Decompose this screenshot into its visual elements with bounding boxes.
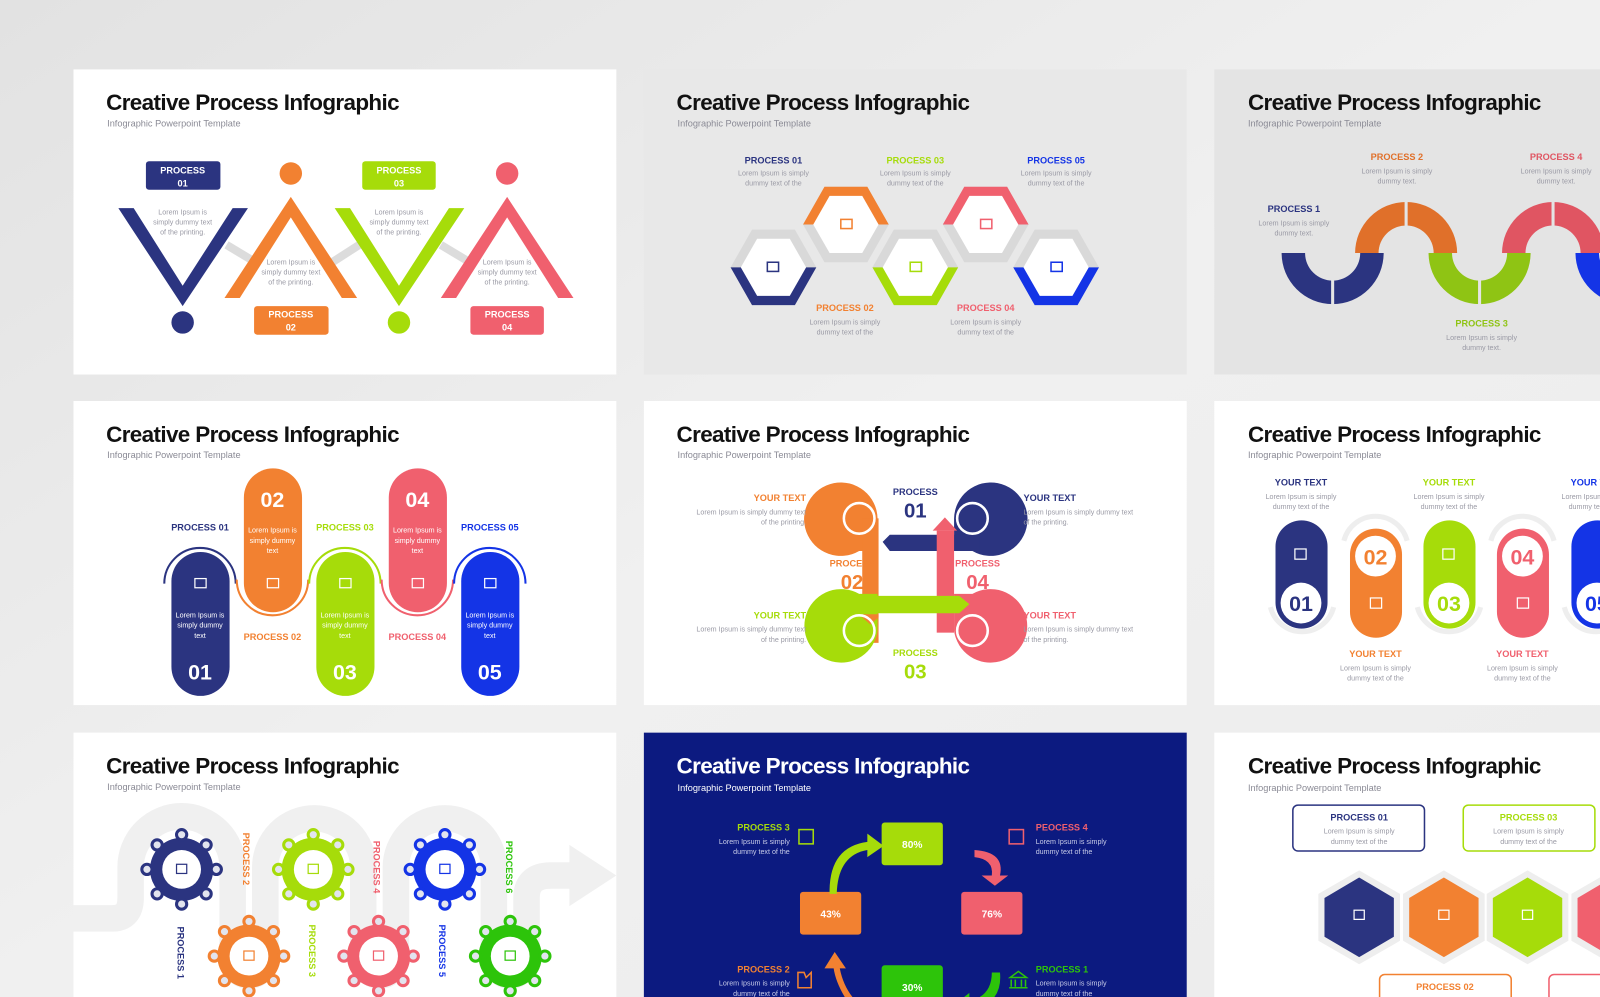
process texts <box>719 823 1107 997</box>
title: Creative Process Infographic <box>106 90 399 115</box>
top boxes: Lorem Ipsum is simply <box>1324 828 1395 836</box>
process texts: PROCESS 3 <box>737 823 790 833</box>
pill 01: 01 <box>1289 592 1313 616</box>
panel: card 6 numbered pills: Lorem Ipsum is simply <box>1414 493 1485 501</box>
triangle 4 pink: 04 <box>502 323 513 333</box>
labels: PROCESS 01 <box>745 155 802 165</box>
labels: Lorem Ipsum is simply <box>880 170 951 178</box>
triangle 2 orange: of the printing. <box>268 279 313 287</box>
panel: card 6 numbered pills: Lorem Ipsum is simply <box>1487 664 1558 672</box>
pill 04: simply dummy <box>395 537 441 545</box>
text blocks: YOUR TEXT <box>1023 610 1076 620</box>
pill 01: text <box>194 632 206 640</box>
title: Creative Process Infographic <box>1248 90 1541 115</box>
labels: dummy text of the <box>817 329 873 337</box>
labels: Lorem Ipsum is simply <box>1361 167 1433 175</box>
panel: card 5 loop: 01 <box>904 500 927 522</box>
labels: PROCESS 04 <box>957 303 1015 313</box>
triangle 1 navy: of the printing. <box>160 229 205 237</box>
pill 05 <box>1571 520 1600 629</box>
text blocks: YOUR TEXT <box>754 610 807 620</box>
pill 01: PROCESS 01 <box>171 523 229 533</box>
vertical labels: PROCESS 3 <box>307 924 317 977</box>
labels: dummy text. <box>1462 344 1501 352</box>
text blocks: YOUR TEXT <box>754 493 807 503</box>
pill 03 <box>316 523 374 696</box>
panel: card 5 loop: PROCESS <box>955 558 1000 568</box>
triangle 3 green <box>335 161 464 334</box>
process texts: PROCESS 2 <box>737 964 790 974</box>
text blocks: of the printing. <box>1023 636 1069 644</box>
pill 02: text <box>267 547 278 555</box>
labels: PROCESS 05 <box>1027 155 1085 165</box>
top boxes: PROCESS 02 <box>1416 982 1474 992</box>
wave segments <box>1282 200 1600 306</box>
triangle 3 green: 03 <box>394 179 404 189</box>
pill 05: simply dummy <box>467 622 513 630</box>
road path <box>73 816 571 976</box>
pill 03: 03 <box>1437 592 1461 616</box>
text blocks: Lorem Ipsum is simply dummy text <box>696 626 806 634</box>
subtitle: Infographic Powerpoint Template <box>1248 450 1381 460</box>
boxes: 76% <box>982 909 1002 920</box>
pill 02 <box>244 468 302 642</box>
title: Creative Process Infographic <box>1248 753 1541 778</box>
panel: card 6 numbered pills: dummy text of the <box>1494 675 1551 683</box>
triangle 3 green: simply dummy text <box>369 218 428 226</box>
hexagons <box>1318 870 1600 964</box>
pill 02: Lorem Ipsum is <box>248 527 297 535</box>
panel: card 8 cycle dark <box>644 733 1187 997</box>
pill 01 <box>1276 520 1328 629</box>
subtitle: Infographic Powerpoint Template <box>678 450 811 460</box>
pill 03: text <box>339 632 351 640</box>
title: Creative Process Infographic <box>677 753 970 778</box>
pill 04 <box>389 468 447 642</box>
vertical labels: PROCESS 2 <box>241 833 251 885</box>
panel: card 7 gears <box>73 733 616 997</box>
hexagon pink <box>943 187 1029 262</box>
triangle 1 navy: simply dummy text <box>153 218 212 226</box>
labels: Lorem Ipsum is simply <box>950 318 1022 326</box>
panel: card 5 loop <box>644 401 1187 705</box>
pill 03: simply dummy <box>322 622 368 630</box>
title: Creative Process Infographic <box>1248 422 1541 447</box>
panel: card 5 loop: 02 <box>841 572 863 594</box>
triangle 2 orange <box>224 162 357 335</box>
panel: card 6 numbered pills: YOUR TEXT <box>1275 478 1328 488</box>
top boxes <box>1293 805 1600 997</box>
title: Creative Process Infographic <box>677 90 970 115</box>
subtitle: Infographic Powerpoint Template <box>1248 119 1381 129</box>
vertical labels: PROCESS 5 <box>437 924 447 977</box>
subtitle: Infographic Powerpoint Template <box>107 782 241 792</box>
pill 04: 04 <box>1511 545 1534 569</box>
labels: dummy text of the <box>957 329 1014 337</box>
gears <box>142 830 550 996</box>
top boxes: PROCESS 03 <box>1500 812 1557 822</box>
vertical labels: PROCESS 1 <box>176 927 186 979</box>
triangle 2 orange: PROCESS <box>268 309 313 319</box>
labels: PROCESS 2 <box>1371 152 1423 162</box>
triangle 1 navy <box>118 161 248 334</box>
top boxes: Lorem Ipsum is simply <box>1493 828 1564 836</box>
vertical labels: PROCESS 4 <box>371 841 381 894</box>
pill 01: simply dummy <box>177 622 223 630</box>
labels: dummy text. <box>1378 178 1416 186</box>
panel: card 6 numbered pills: Lorem Ipsum is simply <box>1340 664 1411 672</box>
triangle 1 navy: PROCESS <box>160 165 205 175</box>
text blocks <box>696 493 1133 644</box>
triangle 4 pink: of the printing. <box>485 279 530 287</box>
labels: PROCESS 4 <box>1530 152 1583 162</box>
boxes: 30% <box>902 983 922 994</box>
vertical labels <box>176 833 514 979</box>
hexagon blue <box>1013 230 1099 305</box>
panel: card 5 loop: 04 <box>966 572 990 594</box>
labels: PROCESS 3 <box>1455 319 1508 329</box>
top boxes: dummy text of the <box>1500 838 1557 846</box>
panel: card 1 triangles <box>73 69 616 374</box>
panel: card 6 numbered pills: YOUR TEXT <box>1349 649 1402 659</box>
panel: card 5 loop: PROCESS <box>893 487 938 497</box>
process texts: Lorem Ipsum is simply <box>719 980 790 988</box>
labels: Lorem Ipsum is simply <box>809 318 881 326</box>
subtitle: Infographic Powerpoint Template <box>1248 783 1381 793</box>
labels: dummy text. <box>1537 178 1576 186</box>
loop shape <box>804 482 1028 663</box>
pill 01: 01 <box>188 661 212 685</box>
hexagon green <box>872 230 958 305</box>
pill 05: 05 <box>478 661 502 685</box>
text blocks: of the printing. <box>1023 518 1069 526</box>
process texts: PEOCESS 4 <box>1036 823 1089 833</box>
subtitle: Infographic Powerpoint Template <box>678 119 811 129</box>
subtitle: Infographic Powerpoint Template <box>107 450 241 460</box>
pill 02 <box>1350 529 1402 638</box>
vertical labels: PROCESS 6 <box>504 841 514 893</box>
triangle 3 green: Lorem Ipsum is <box>375 208 424 216</box>
subtitle: Infographic Powerpoint Template <box>107 119 241 129</box>
boxes: 43% <box>820 909 841 920</box>
labels: dummy text of the <box>887 180 944 188</box>
triangle 2 orange: simply dummy text <box>261 268 320 276</box>
title: Creative Process Infographic <box>106 753 399 778</box>
process texts: dummy text of the <box>1036 848 1092 856</box>
pill 01: Lorem Ipsum is <box>176 611 225 619</box>
labels: Lorem Ipsum is simply <box>1021 170 1092 178</box>
title: Creative Process Infographic <box>106 422 399 447</box>
panel: card 5 loop: PROCESS <box>893 648 938 658</box>
panel: card 6 numbered pills: YOUR TEXT <box>1496 649 1549 659</box>
pill 03: Lorem Ipsum is <box>321 611 370 619</box>
text blocks: of the printing. <box>761 518 806 526</box>
triangle 2 orange: 02 <box>286 323 296 333</box>
labels: PROCESS 1 <box>1268 204 1320 214</box>
process texts: Lorem Ipsum is simply <box>1036 980 1107 988</box>
labels: Lorem Ipsum is simply <box>1446 334 1517 342</box>
panel: card 6 numbered pills: YOUR TEXT <box>1423 478 1476 488</box>
triangle 4 pink: Lorem Ipsum is <box>483 258 532 266</box>
panel: card 6 numbered pills: dummy text of the <box>1273 503 1329 511</box>
pill 03: PROCESS 03 <box>316 523 374 533</box>
process texts: dummy text of the <box>733 848 790 856</box>
labels: Lorem Ipsum is simply <box>1521 167 1592 175</box>
process texts: PROCESS 1 <box>1036 964 1088 974</box>
pill 02: 02 <box>1364 545 1387 569</box>
top boxes: PROCESS 01 <box>1330 812 1388 822</box>
labels: dummy text of the <box>745 180 802 188</box>
panel: card 2 hexagons <box>644 69 1187 374</box>
panel: card 6 numbered pills: dummy text of the <box>1421 503 1477 511</box>
labels <box>1258 152 1592 352</box>
triangle 2 orange: Lorem Ipsum is <box>266 258 316 266</box>
top boxes: dummy text of the <box>1331 838 1388 846</box>
pill 03: 03 <box>333 661 357 685</box>
hexagon orange <box>803 187 889 262</box>
panel: card 5 loop: 03 <box>904 662 927 684</box>
triangle 4 pink <box>441 162 573 335</box>
labels: dummy text of the <box>1028 180 1084 188</box>
pill 05 <box>461 523 519 696</box>
panel: card 9 hexagon row <box>1214 733 1600 997</box>
pill 02: 02 <box>261 488 284 512</box>
pill 04 <box>1497 529 1549 638</box>
text blocks: Lorem Ipsum is simply dummy text <box>1023 626 1133 634</box>
pill 03 <box>1423 520 1475 629</box>
pill 02: PROCESS 02 <box>244 632 301 642</box>
triangle 3 green: PROCESS <box>377 165 421 175</box>
text blocks: of the printing. <box>761 636 806 644</box>
title: Creative Process Infographic <box>677 422 970 447</box>
pill 04: text <box>412 547 423 555</box>
hexagon navy <box>731 230 816 305</box>
pill 04: PROCESS 04 <box>389 632 447 642</box>
panel: card 6 numbered pills: dummy text of the <box>1347 675 1404 683</box>
triangle 4 pink: PROCESS <box>485 309 530 319</box>
panel: card 4 pills <box>73 401 616 705</box>
process texts: Lorem Ipsum is simply <box>719 838 790 846</box>
labels: PROCESS 03 <box>886 155 944 165</box>
arrows <box>824 834 1008 997</box>
boxes <box>800 822 1022 997</box>
triangle 1 navy: 01 <box>178 179 188 189</box>
pill 02: simply dummy <box>250 537 296 545</box>
labels <box>738 155 1092 337</box>
pill 04: 04 <box>405 488 429 512</box>
panel: card 5 loop: PROCESS <box>830 558 874 568</box>
pill 01 <box>171 523 230 696</box>
triangle 1 navy: Lorem Ipsum is <box>158 208 207 216</box>
triangle 3 green: of the printing. <box>376 229 422 237</box>
text blocks: Lorem Ipsum is simply dummy text <box>696 508 806 516</box>
labels: Lorem Ipsum is simply <box>1258 220 1330 228</box>
text blocks: YOUR TEXT <box>1023 493 1076 503</box>
pill 04: Lorem Ipsum is <box>393 527 442 535</box>
panel: card 3 wave <box>1214 69 1600 374</box>
panel: card 6 numbered pills <box>1214 401 1600 705</box>
labels: PROCESS 02 <box>816 303 874 313</box>
pill 05: text <box>484 632 496 640</box>
boxes: 80% <box>902 840 922 851</box>
pill 05: Lorem Ipsum is <box>465 611 515 619</box>
labels: Lorem Ipsum is simply <box>738 170 809 178</box>
subtitle: Infographic Powerpoint Template <box>678 783 811 793</box>
labels: dummy text. <box>1274 230 1313 238</box>
process texts: Lorem Ipsum is simply <box>1036 838 1107 846</box>
text blocks: Lorem Ipsum is simply dummy text <box>1023 508 1133 516</box>
triangle 4 pink: simply dummy text <box>478 268 537 276</box>
panel: card 6 numbered pills: Lorem Ipsum is simply <box>1266 493 1337 501</box>
pill 05: PROCESS 05 <box>461 523 519 533</box>
